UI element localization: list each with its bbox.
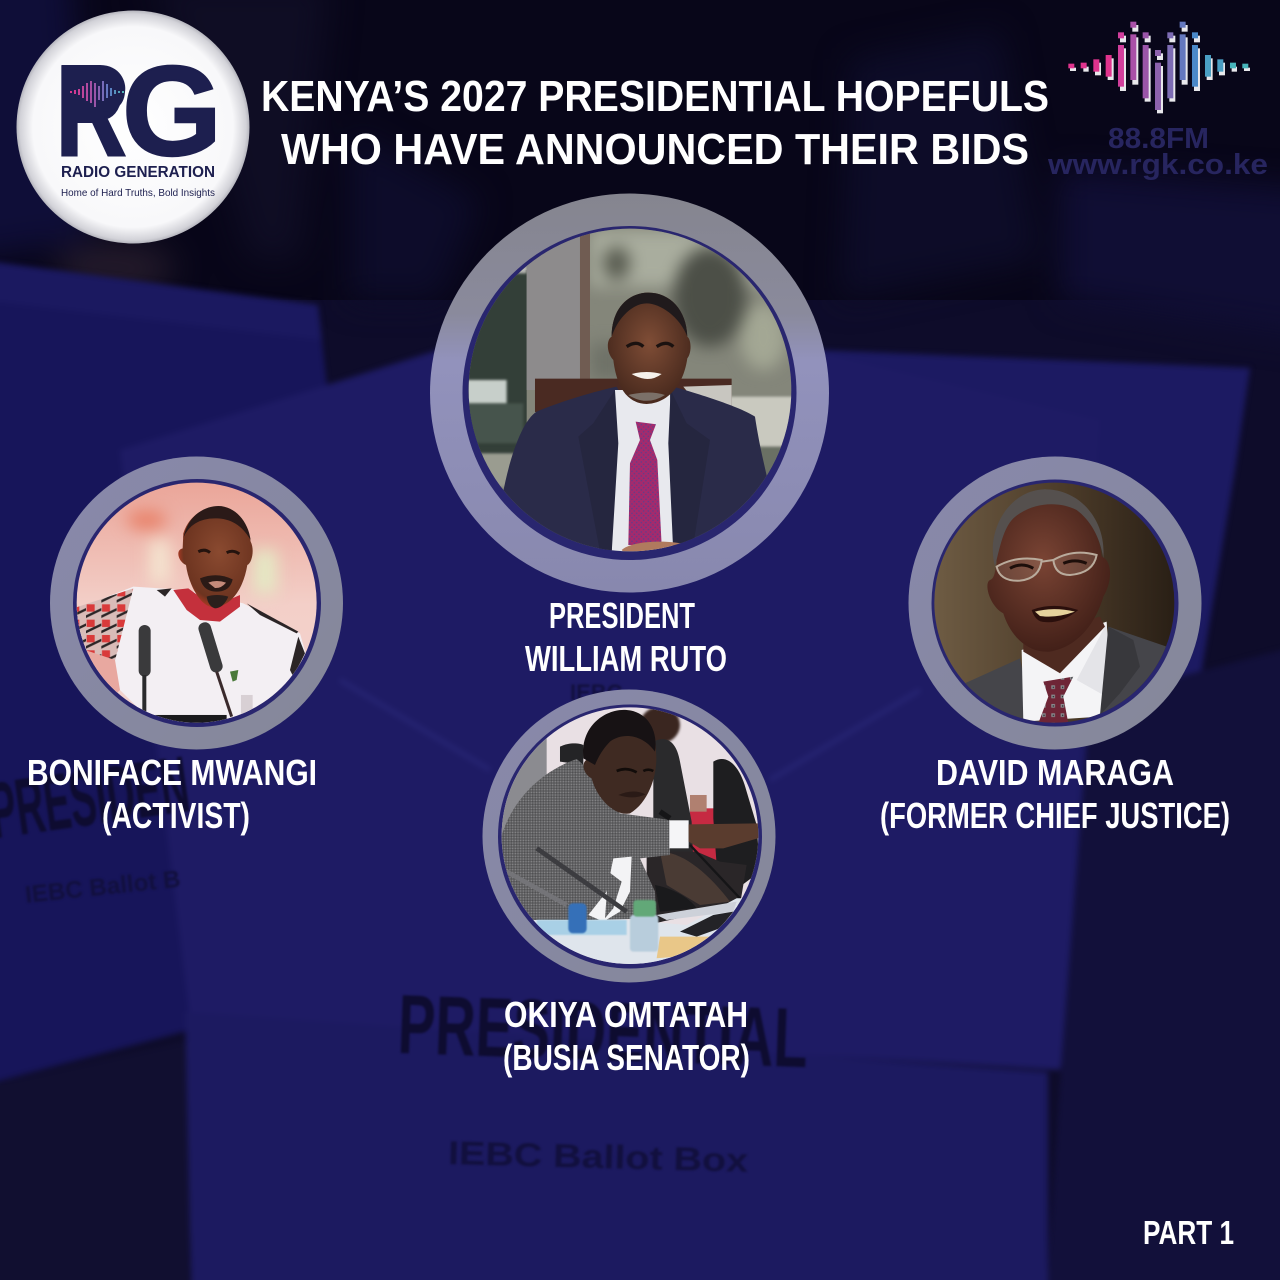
background text: ballot box labels: IEBC Ballot Box: [448, 1134, 749, 1179]
panel: William Ruto portrait: [430, 190, 830, 592]
label: President William Ruto: PRESIDENT: [549, 595, 695, 636]
panel: Okiya Omtatah portrait: [480, 685, 780, 985]
label: Okiya Omtatah: OKIYA OMTATAH: [504, 994, 748, 1035]
microphones: [537, 848, 627, 912]
label: Boniface Mwangi: BONIFACE MWANGI: [27, 752, 317, 793]
chairs: [653, 739, 693, 862]
logo mark: R.G letters: G: [122, 40, 222, 183]
logo tagline: Home of Hard Truths, Bold Insights: [61, 187, 215, 199]
label: Okiya Omtatah: [503, 994, 750, 1078]
panel: Boniface Mwangi portrait: [50, 456, 343, 750]
label: President William Ruto: WILLIAM RUTO: [525, 638, 727, 679]
title: WHO HAVE ANNOUNCED THEIR BIDS: [281, 125, 1029, 174]
head: [608, 293, 691, 404]
cuff and hand: [669, 820, 689, 848]
label: David Maraga: [880, 752, 1230, 836]
logo mark: R.G letters: R: [56, 40, 126, 183]
background text: ballot box labels: IEBC Ballot B: [24, 866, 182, 909]
label: Okiya Omtatah: (BUSIA SENATOR): [503, 1037, 750, 1078]
neck: [1023, 617, 1105, 673]
logo badge: Radio Generation: [16, 10, 250, 244]
desk: [534, 898, 742, 964]
part label: PART 1: [1143, 1214, 1234, 1251]
station frequency and website: [1047, 123, 1268, 181]
icon: radio waveform logo: [1068, 22, 1250, 113]
collar: [173, 588, 240, 622]
suit: [966, 626, 1166, 718]
station frequency and website: 88.8FM: [1108, 123, 1209, 155]
head: [178, 507, 253, 607]
tie: [628, 422, 662, 545]
chair base and bag: [647, 852, 747, 925]
logo mark: R.G letters: [56, 40, 222, 183]
label: Boniface Mwangi: [27, 752, 317, 836]
logo name: RADIO GENERATION: [61, 164, 215, 181]
title: [261, 72, 1049, 174]
label: David Maraga: DAVID MARAGA: [936, 752, 1174, 793]
background text: ballot box labels: [0, 680, 809, 1179]
panel: David Maraga portrait: [900, 450, 1210, 760]
jacket: [500, 759, 670, 922]
suit: [502, 387, 768, 553]
glasses: [997, 553, 1097, 581]
background text: ballot box labels: IEBC: [570, 680, 623, 705]
head: [584, 736, 656, 814]
logo mark: waveform: [70, 81, 124, 107]
station frequency and website: www.rgk.co.ke: [1047, 149, 1268, 181]
microphones: [139, 625, 151, 677]
title: KENYA’S 2027 PRESIDENTIAL HOPEFULS: [261, 72, 1049, 121]
head: [987, 500, 1110, 652]
label: President William Ruto: [525, 595, 727, 679]
shirt: [73, 587, 307, 727]
background text: ballot box labels: PRESIDENTIAL: [396, 977, 809, 1085]
label: Boniface Mwangi: (ACTIVIST): [102, 795, 250, 836]
tie: [1038, 677, 1073, 723]
